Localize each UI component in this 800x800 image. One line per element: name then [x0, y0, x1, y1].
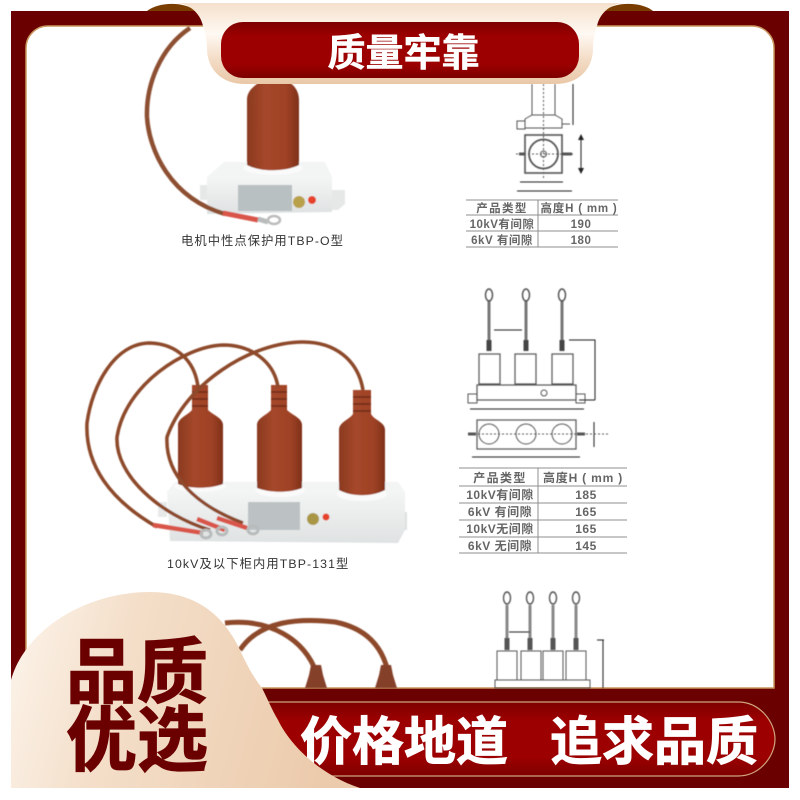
table 2: height by type: 6kV 无间隙 [468, 539, 532, 553]
table 1: height by type [466, 200, 618, 247]
table 2: height by type: 165 [575, 505, 597, 519]
drawing 2: TBP-131 dimensions [468, 289, 608, 457]
white content panel [26, 26, 774, 688]
table 2: height by type: 10kV无间隙 [466, 522, 534, 536]
caption: TBP-131: 10kV及以下柜内用TBP-131型 [167, 557, 349, 571]
caption: TBP-O: 电机中性点保护用TBP-O型 [181, 233, 344, 248]
decorative dome left [147, 4, 196, 11]
slogan text [300, 714, 758, 772]
top title banner [175, 3, 625, 84]
table 1: height by type: 产品类型 [476, 201, 528, 215]
table 1: height by type: 190 [571, 219, 591, 231]
drawing 3: partial four-pole dimensions [495, 592, 604, 688]
drawing 1: TBP-O dimensions [516, 84, 584, 191]
table 2: height by type: 高度H ( mm ) [543, 470, 623, 485]
decorative dome right [604, 4, 653, 11]
slogan text: 价格地道 [300, 714, 508, 772]
badge text: 优选 [66, 702, 208, 781]
table 1: height by type: 180 [571, 235, 591, 247]
banner title text: 质量牢靠 [327, 33, 480, 75]
table 2: height by type: 6kV 有间隙 [468, 504, 532, 519]
bottom slogan pill [250, 702, 775, 776]
table 2: height by type: 产品类型 [473, 470, 527, 485]
badge text [66, 634, 208, 781]
table 1: height by type: 高度H ( mm ) [540, 201, 618, 215]
table 2: height by type: 145 [575, 539, 597, 553]
product 1: TBP-O arrester photo [147, 28, 345, 224]
quality badge [11, 592, 360, 788]
table 2: height by type: 165 [575, 522, 597, 536]
slogan text: 追求品质 [550, 714, 758, 772]
table 1: height by type: 6kV 有间隙 [471, 233, 533, 247]
table 2: height by type: 10kV有间隙 [466, 487, 534, 502]
product 3: partial arrester photo [225, 620, 397, 688]
table 2: height by type [459, 468, 627, 553]
table 1: height by type: 10kV有间隙 [470, 217, 534, 231]
badge text: 品质 [66, 634, 208, 713]
table 2: height by type: 185 [575, 488, 597, 502]
product 2: TBP-131 arrester photo [87, 342, 407, 543]
